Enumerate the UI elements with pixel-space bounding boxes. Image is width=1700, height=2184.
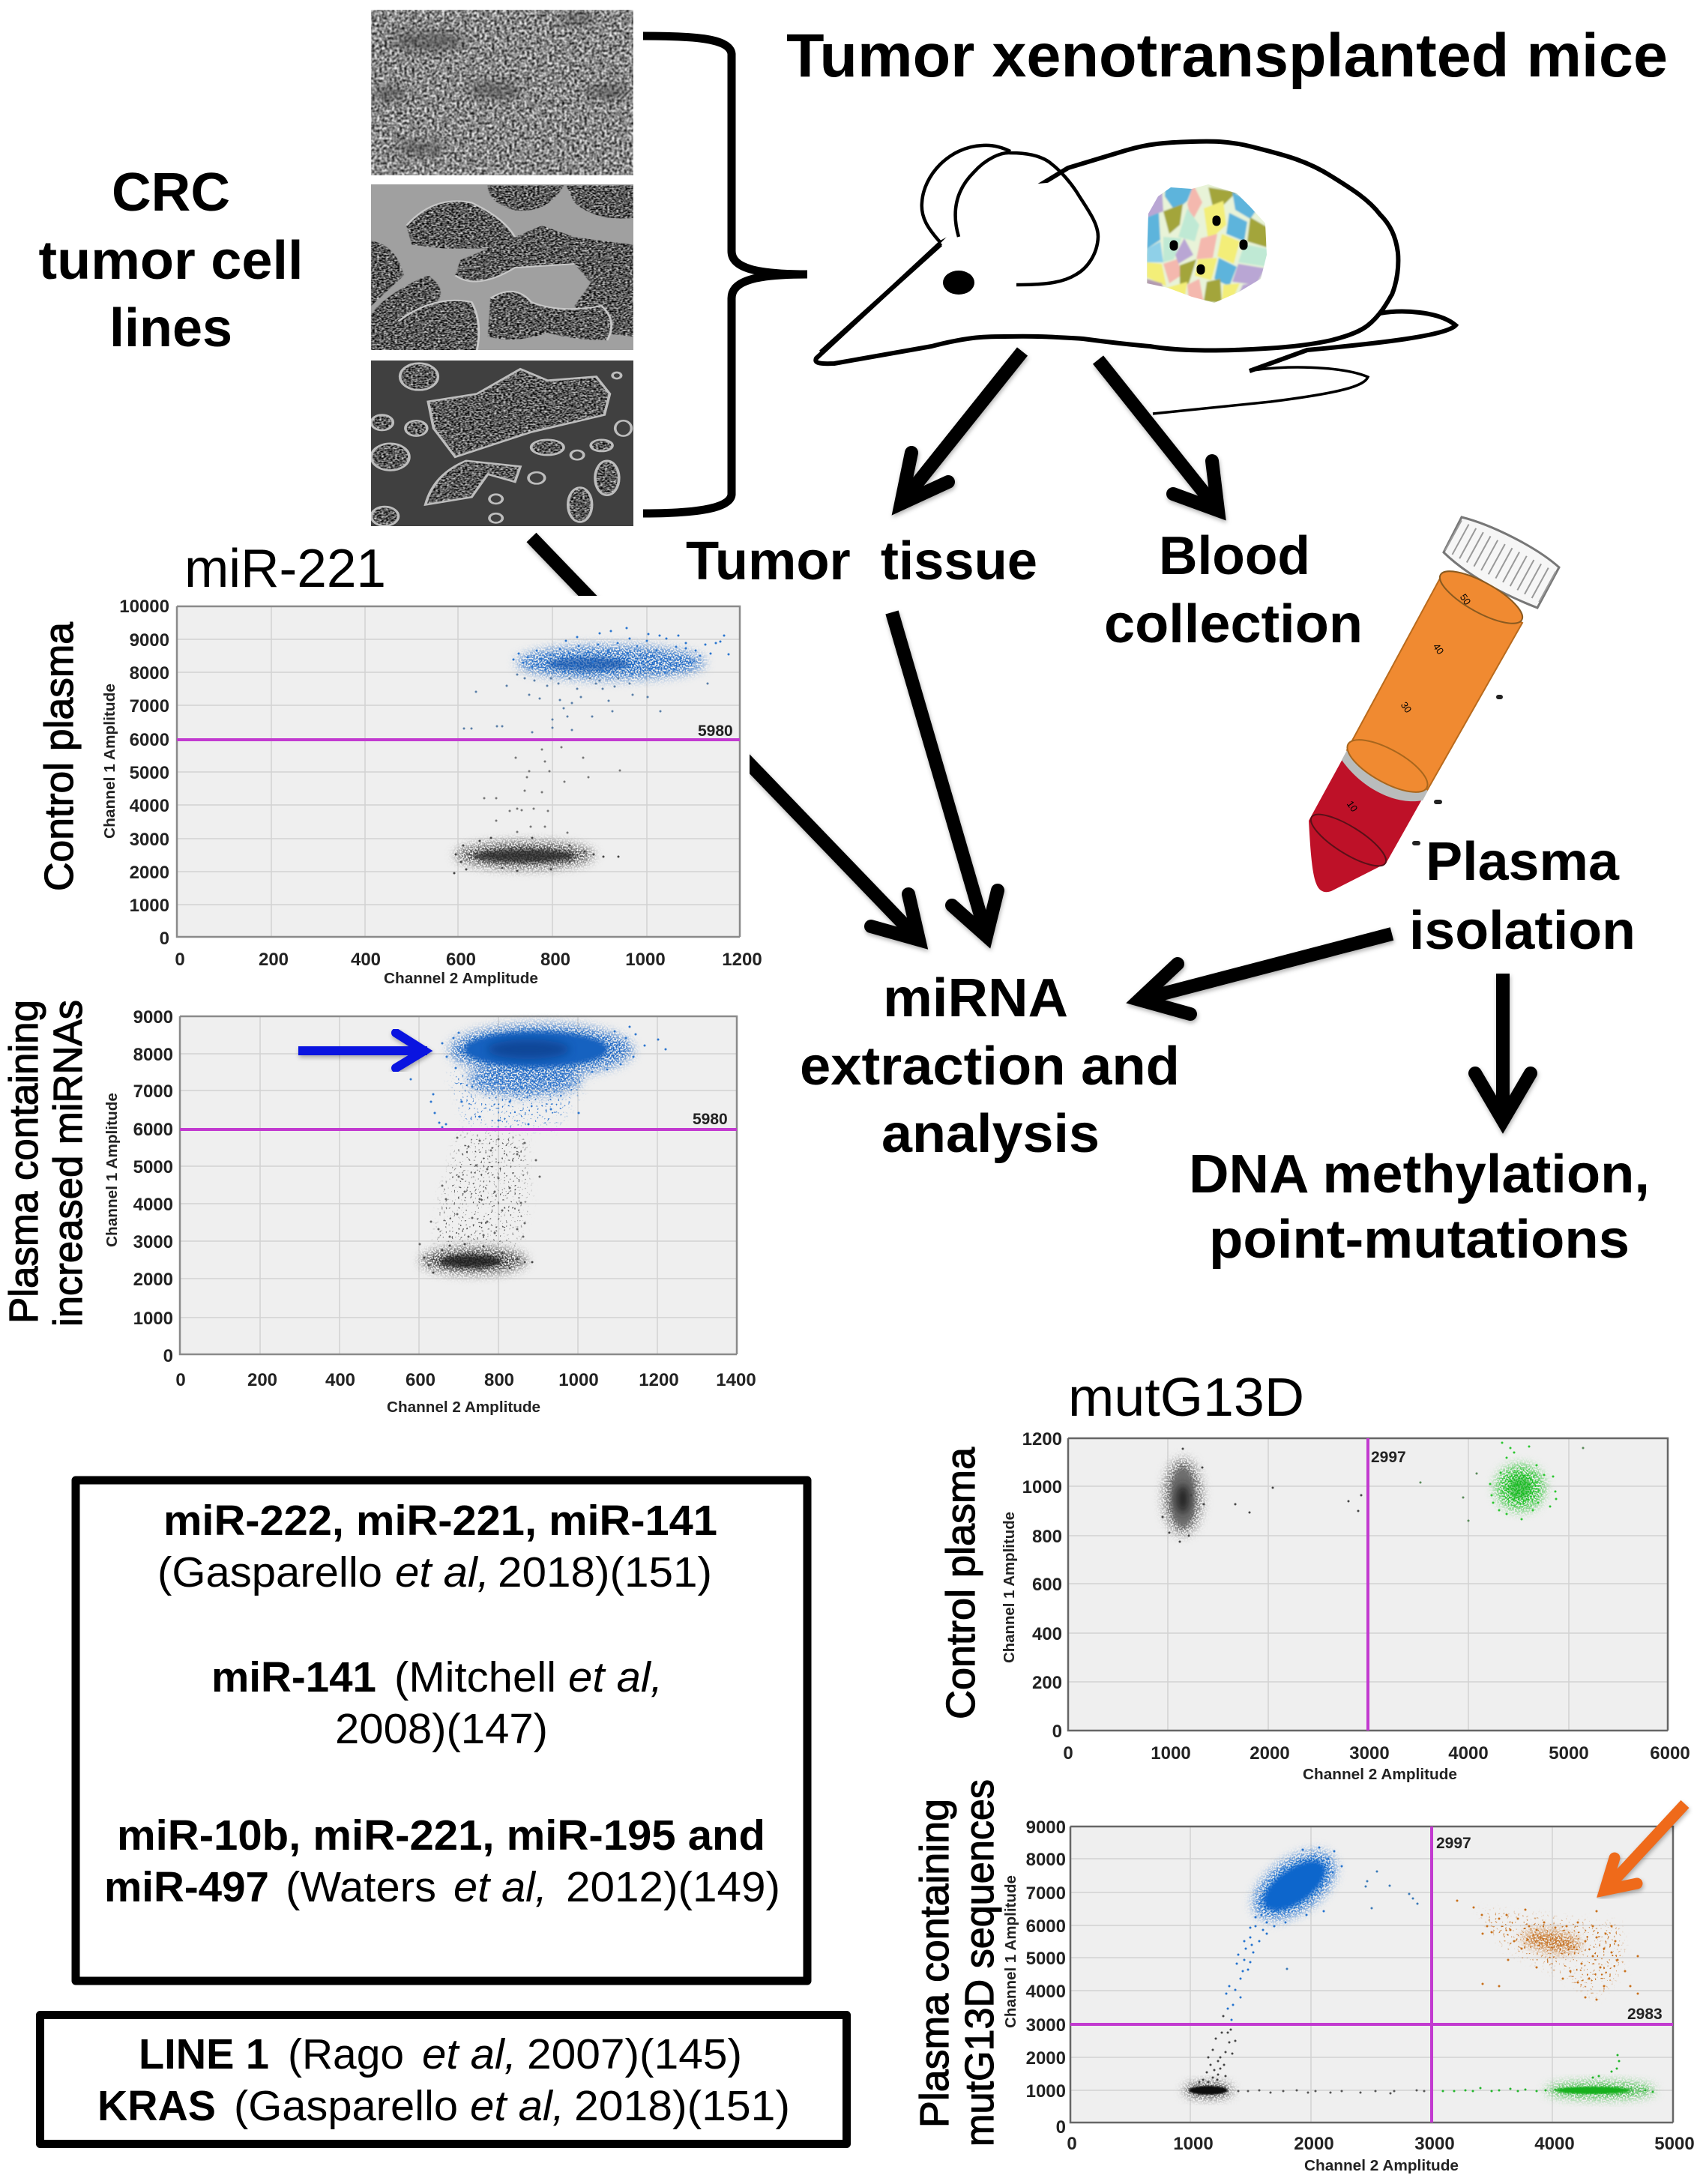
threshold line 5980: 5980: [698, 723, 733, 740]
reference: Waters 2012: miR-10b, miR-221, miR-195 and: [117, 1812, 765, 1859]
reference: KRAS Gasparello 2018: et al,: [470, 2082, 564, 2130]
x-axis ticks: 0: [175, 1370, 186, 1390]
arrow: mouse to tumor tissue: [901, 352, 1022, 504]
y-axis ticks: [1022, 1429, 1062, 1742]
arrow: blue positive droplets: [298, 1033, 427, 1068]
black negative droplet cluster: [421, 1244, 532, 1273]
y-axis ticks: 400: [1032, 1624, 1062, 1644]
micrograph 2: colonies: [371, 184, 633, 350]
reference: Waters 2012: miR-497: [104, 1863, 269, 1911]
reference: Gasparello 2018: 2018)(151): [498, 1548, 712, 1596]
y-axis ticks: [1026, 1818, 1066, 2138]
label: Plasma isolation: Plasma: [1426, 832, 1620, 892]
x-axis ticks: 4000: [1448, 1743, 1489, 1764]
axis titles: Channel 1 Amplitude: [1003, 1875, 1019, 2028]
tube cap: [1444, 517, 1559, 608]
heading: CRC tumor cell lines: lines: [109, 298, 232, 358]
mouse eye: [943, 271, 974, 295]
green droplet cluster: [1443, 2055, 1654, 2098]
row label: Control plasma (mutG13D): Control plasma: [938, 1447, 983, 1719]
y-axis ticks: 0: [1056, 2117, 1066, 2138]
label: DNA methylation, point-mutations: point-mutations: [1209, 1210, 1630, 1270]
y-axis ticks: 8000: [1026, 1850, 1066, 1870]
y-axis ticks: 4000: [130, 796, 169, 816]
x-axis ticks: 5000: [1549, 1743, 1589, 1764]
tube buffy coat band: [1342, 750, 1428, 801]
y-axis ticks: [133, 1007, 173, 1366]
x-axis ticks: 1000: [625, 950, 666, 970]
tube volume marks: 30: [1399, 699, 1414, 715]
reference: Mitchell 2008: 2008)(147): [335, 1705, 548, 1753]
y-axis ticks: 9000: [133, 1007, 173, 1028]
label: miRNA extraction and analysis: [800, 968, 1180, 1164]
arrow: plasma to miRNA analysis: [1139, 934, 1392, 1014]
reference: LINE 1 Rago 2007: 2007)(145): [527, 2030, 742, 2078]
reference: Gasparello 2018: et al,: [395, 1548, 489, 1596]
x-axis ticks: 4000: [1534, 2134, 1575, 2154]
x-axis ticks: [175, 950, 762, 970]
heading: CRC tumor cell lines: [39, 163, 303, 358]
threshold line 5980: 5980: [693, 1111, 728, 1128]
threshold line 2997: 2997: [1371, 1449, 1406, 1466]
x-axis ticks: 0: [175, 950, 185, 970]
y-axis ticks: 3000: [130, 830, 169, 850]
reference: Mitchell 2008: et al,: [568, 1653, 663, 1701]
mouse tail: [1153, 312, 1456, 414]
reference: Waters 2012: [104, 1812, 780, 1911]
x-axis ticks: 1200: [639, 1370, 679, 1390]
y-axis ticks: 1000: [1022, 1477, 1062, 1497]
x-axis ticks: 600: [446, 950, 476, 970]
y-axis ticks: 1000: [133, 1309, 173, 1329]
y-axis ticks: 3000: [133, 1232, 173, 1252]
y-axis ticks: 1000: [130, 896, 169, 916]
reference: LINE 1 Rago 2007: et al,: [422, 2030, 516, 2078]
label: Blood collection: Blood: [1159, 526, 1310, 586]
row label: Plasma containing mutG13D sequences: Plasma containing: [912, 1799, 957, 2128]
y-axis ticks: 7000: [1026, 1883, 1066, 1904]
arrow: tumor tissue to miRNA analysis: [892, 612, 998, 936]
heading: mutG13D: mutG13D: [1068, 1368, 1304, 1428]
black negative droplet cluster: [1163, 1449, 1361, 1542]
threshold lines 2997 and 2983: 2997: [1436, 1835, 1471, 1852]
reference: LINE 1 Rago 2007: [139, 2030, 742, 2078]
reference: Mitchell 2008: (Mitchell: [394, 1653, 556, 1701]
reference: Mitchell 2008: miR-141: [211, 1653, 376, 1701]
arrow: cell lines to miRNA analysis (passes behind chart): [531, 537, 919, 940]
icon: mouse with tumor: [816, 142, 1456, 414]
icon: centrifuge tube with separated plasma: [1304, 517, 1559, 892]
x-axis ticks: 1000: [1151, 1743, 1191, 1764]
tumor dark cells: [1174, 220, 1244, 271]
arrow: mouse to blood collection: [1098, 360, 1218, 510]
arrow: orange droplets: [1605, 1804, 1685, 1890]
curly bracket joining cell lines to mouse: [643, 36, 807, 513]
label: miRNA extraction and analysis: analysis: [881, 1104, 1100, 1164]
x-axis ticks: 400: [325, 1370, 355, 1390]
y-axis ticks: [119, 597, 169, 949]
x-axis ticks: 400: [351, 950, 381, 970]
x-axis ticks: 200: [259, 950, 289, 970]
y-axis ticks: 0: [1052, 1722, 1062, 1742]
x-axis ticks: 0: [1063, 1743, 1073, 1764]
x-axis ticks: 800: [484, 1370, 514, 1390]
y-axis ticks: 5000: [1026, 1949, 1066, 1969]
micrograph 1: dense culture: [371, 10, 633, 175]
x-axis ticks: [1067, 2134, 1695, 2154]
heading: CRC tumor cell lines: tumor cell: [39, 231, 303, 291]
tube red cell layer: [1309, 758, 1423, 892]
y-axis ticks: 600: [1032, 1575, 1062, 1595]
axis titles: Channel 1 Amplitude: [1001, 1512, 1018, 1663]
x-axis ticks: 1000: [558, 1370, 599, 1390]
panel: miRNA references box: [76, 1480, 807, 1981]
axis titles: Channel 2 Amplitude: [1303, 1767, 1457, 1783]
label: DNA methylation, point-mutations: [1189, 1144, 1650, 1270]
row label: Plasma containing increased miRNAs: Plasma containing: [1, 1000, 46, 1324]
x-axis ticks: 1400: [716, 1370, 756, 1390]
orange double-positive droplet cluster: [1457, 1901, 1638, 2000]
x-axis ticks: 800: [540, 950, 570, 970]
blue positive droplet cluster: [464, 628, 729, 732]
tube volume marks: 50: [1458, 591, 1473, 607]
y-axis ticks: 7000: [133, 1082, 173, 1102]
black negative droplet cluster: [454, 838, 618, 873]
x-axis ticks: 1000: [1173, 2134, 1214, 2154]
blue positive droplet cluster: [1226, 1838, 1417, 2020]
axis titles: [104, 1093, 540, 1416]
x-axis ticks: 5000: [1654, 2134, 1695, 2154]
label: Plasma isolation: [1409, 832, 1636, 961]
panel: CRC cell line micrographs: [371, 10, 633, 526]
arrows: mouse to tissue and blood, tissue and cells to miRNA, plasma outputs: [531, 352, 1531, 1120]
chart: mutG13D control plasma droplet plot: [1001, 1429, 1690, 1783]
y-axis ticks: 5000: [133, 1157, 173, 1177]
reference: Gasparello 2018: (Gasparello: [157, 1548, 382, 1596]
x-axis ticks: 3000: [1414, 2134, 1455, 2154]
x-axis ticks: 1200: [722, 950, 762, 970]
label: miRNA extraction and analysis: extraction and: [800, 1037, 1180, 1096]
axis titles: Channel 2 Amplitude: [1304, 2158, 1459, 2174]
x-axis ticks: 200: [247, 1370, 277, 1390]
axis titles: Channel 1 Amplitude: [104, 1093, 121, 1247]
reference: LINE 1 Rago 2007: (Rago: [288, 2030, 404, 2078]
row label: Plasma containing mutG13D sequences: mutG13D sequences: [957, 1779, 1002, 2147]
y-axis ticks: 6000: [1026, 1916, 1066, 1937]
scattered rain droplets: [420, 1135, 540, 1244]
blue positive droplet cluster: [411, 1025, 666, 1128]
panel: DNA references box: [40, 2015, 847, 2144]
tube plasma layer: [1347, 577, 1522, 793]
green droplet cluster: [1420, 1443, 1583, 1521]
tube volume marks: 40: [1431, 641, 1446, 657]
reference: KRAS Gasparello 2018: 2018)(151): [574, 2082, 790, 2130]
reference: KRAS Gasparello 2018: (Gasparello: [234, 2082, 458, 2130]
row label: Control plasma (miR-221): Control plasma: [37, 621, 82, 891]
chart: miR-221 plasma with increased miRNAs droplet plot: [104, 1007, 756, 1416]
y-axis ticks: 2000: [133, 1270, 173, 1290]
y-axis ticks: 1000: [1026, 2081, 1066, 2102]
y-axis ticks: 8000: [133, 1045, 173, 1065]
y-axis ticks: 9000: [1026, 1818, 1066, 1838]
black tail and negative droplet cluster: [1184, 2016, 1424, 2097]
y-axis ticks: 2000: [130, 863, 169, 883]
row label: Plasma containing increased miRNAs: [1, 1000, 91, 1327]
y-axis ticks: 5000: [130, 763, 169, 783]
axis titles: Channel 1 Amplitude: [102, 684, 118, 839]
x-axis ticks: 600: [406, 1370, 435, 1390]
micrograph 3: sparse colonies on dark background: [371, 361, 633, 526]
y-axis ticks: 3000: [1026, 2015, 1066, 2036]
label: Blood collection: [1104, 526, 1363, 654]
axis titles: [1001, 1512, 1457, 1783]
reference: Mitchell 2008: [211, 1653, 663, 1753]
y-axis ticks: 6000: [130, 730, 169, 750]
y-axis ticks: 4000: [133, 1195, 173, 1215]
y-axis ticks: 1200: [1022, 1429, 1062, 1450]
x-axis ticks: [1063, 1743, 1690, 1764]
mouse body outline: [816, 142, 1398, 364]
y-axis ticks: 10000: [119, 597, 169, 617]
x-axis ticks: [175, 1370, 756, 1390]
title: Tumor xenotransplanted mice: Tumor xenotransplanted mice: [786, 22, 1668, 90]
row label: Plasma containing increased miRNAs: increased miRNAs: [46, 1000, 91, 1327]
y-axis ticks: 4000: [1026, 1982, 1066, 2002]
y-axis ticks: 6000: [133, 1120, 173, 1140]
heading: CRC tumor cell lines: CRC: [112, 163, 230, 223]
threshold lines 2997 and 2983: [1070, 1826, 1673, 2123]
mouse ear: [922, 145, 1010, 243]
x-axis ticks: 0: [1067, 2134, 1077, 2154]
y-axis ticks: 8000: [130, 663, 169, 684]
y-axis ticks: 0: [160, 929, 169, 949]
x-axis ticks: 2000: [1250, 1743, 1290, 1764]
row label: Plasma containing mutG13D sequences: [912, 1779, 1002, 2147]
y-axis ticks: 800: [1032, 1527, 1062, 1547]
y-axis ticks: 9000: [130, 630, 169, 651]
reference: KRAS Gasparello 2018: KRAS: [97, 2082, 216, 2130]
tumor mass: [1145, 180, 1270, 304]
reference: Waters 2012: et al,: [453, 1863, 547, 1911]
y-axis ticks: 200: [1032, 1673, 1062, 1693]
reference: Gasparello 2018: miR-222, miR-221, miR-141: [163, 1497, 717, 1545]
chart: miR-221 control plasma droplet plot: [97, 596, 762, 989]
x-axis ticks: 2000: [1294, 2134, 1334, 2154]
reference: Waters 2012: (Waters: [286, 1863, 436, 1911]
label: miRNA extraction and analysis: miRNA: [883, 968, 1068, 1028]
tube volume marks: [1345, 591, 1473, 814]
y-axis ticks: 7000: [130, 696, 169, 717]
reference: Gasparello 2018: [157, 1497, 717, 1596]
y-axis ticks: 2000: [1026, 2048, 1066, 2069]
axis titles: [1003, 1875, 1459, 2174]
arrow: plasma to DNA methylation: [1475, 974, 1531, 1120]
label: Plasma isolation: isolation: [1409, 901, 1636, 961]
axis titles: [102, 684, 538, 987]
axis titles: Channel 2 Amplitude: [384, 971, 538, 987]
reference: KRAS Gasparello 2018: [97, 2082, 790, 2130]
label: Blood collection: collection: [1104, 594, 1363, 654]
x-axis ticks: 6000: [1650, 1743, 1690, 1764]
axis titles: Channel 2 Amplitude: [387, 1399, 540, 1416]
tube volume marks: 10: [1345, 798, 1360, 814]
heading: miR-221: miR-221: [184, 539, 386, 599]
label: DNA methylation, point-mutations: DNA methylation,: [1189, 1144, 1650, 1204]
label: Tumor tissue: Tumor tissue: [686, 531, 1037, 591]
y-axis ticks: 0: [163, 1346, 173, 1366]
x-axis ticks: 3000: [1349, 1743, 1390, 1764]
reference: Waters 2012: 2012)(149): [566, 1863, 780, 1911]
threshold lines 2997 and 2983: 2983: [1627, 2006, 1663, 2023]
chart: mutG13D plasma droplet plot: [1003, 1804, 1695, 2174]
reference: LINE 1 Rago 2007: LINE 1: [139, 2030, 269, 2078]
scattered rain droplets: [484, 747, 620, 833]
